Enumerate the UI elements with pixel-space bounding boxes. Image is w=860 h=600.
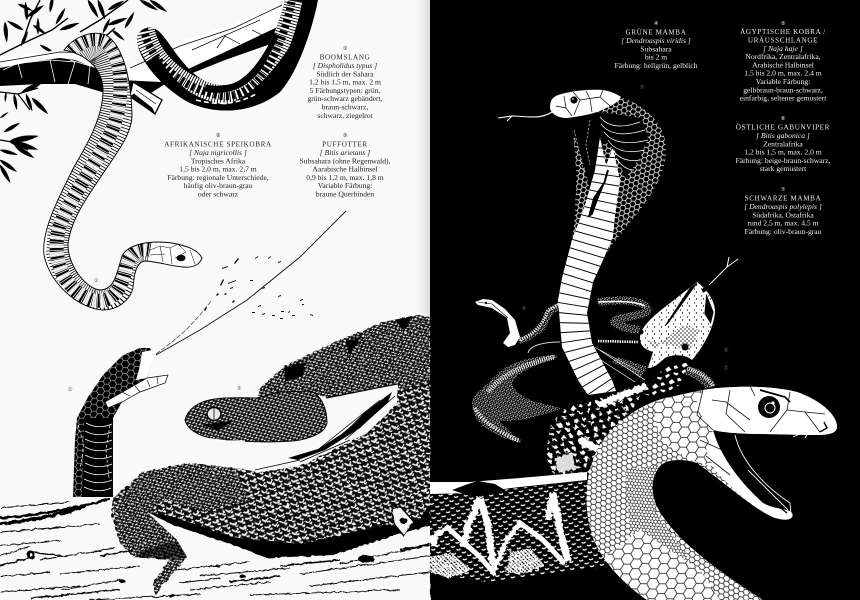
text: Afrikanische Speikobra: Tropisches Afrika [191, 156, 246, 165]
upper coil [258, 315, 430, 400]
text: Schwarze Mamba: Südafrika, Ostafrika [752, 210, 814, 219]
text: Grüne Mamba [615, 21, 698, 70]
illustration: boomslang rear coil [136, 0, 318, 110]
text: Boomslang [307, 46, 383, 120]
text: Grüne Mamba: bis 2 m [645, 53, 667, 62]
text: Puffotter: [ Bitis arietans ] [320, 148, 370, 157]
figure markers: ④ [521, 305, 527, 312]
eye [758, 396, 780, 418]
head and neck [475, 299, 520, 347]
figure markers: ② [67, 386, 73, 393]
illustration: Schwarze Mamba [586, 385, 837, 600]
coil shadow [147, 507, 430, 558]
text: Afrikanische Speikobra: 1,5 bis 2,0 m, max. 2,7 m [179, 165, 257, 174]
figure markers: ③ [236, 385, 242, 392]
text: Boomslang: schwarz, ziegelrot [317, 111, 374, 120]
text: Puffotter: 0,9 bis 1,2 m, max. 1,8 m [306, 173, 384, 182]
hood [562, 97, 666, 282]
text: Afrikanische Speikobra: AFRIKANISCHE SPEIKOBRA [164, 140, 272, 148]
forked tongue [709, 257, 738, 285]
text: Östliche Gabunviper: ÖSTLICHE GABUNVIPER [736, 124, 830, 132]
background: left page [0, 0, 430, 600]
illustration: coil behind cobra [472, 347, 716, 443]
text: Schwarze Mamba [744, 187, 822, 236]
illustration: Östliche Gabunviper head [638, 257, 738, 398]
text: Puffotter: PUFFOTTER [322, 140, 368, 148]
illustration: Afrikanische Speikobra [73, 348, 168, 497]
bone knot on log [392, 506, 414, 536]
dark neck [642, 362, 690, 398]
text: Schwarze Mamba: Färbung: oliv-braun-grau [745, 227, 822, 236]
text: Grüne Mamba: Färbung: hellgrün, gelblich [615, 61, 698, 70]
text: Ägyptische Kobra: einfarbig, seltener gemustert [740, 94, 827, 103]
illustration: venom spray [156, 211, 346, 355]
background: right page [430, 0, 860, 600]
figure markers: ⑥ [723, 347, 729, 354]
text: Afrikanische Speikobra [164, 132, 272, 198]
mouth and fangs [735, 435, 791, 515]
text: Östliche Gabunviper: [ Bitis gabonica ] [756, 131, 810, 140]
text: Östliche Gabunviper: ⑥ [781, 116, 786, 122]
text: Östliche Gabunviper: Färbung: beige-braun-schwarz, [736, 156, 831, 165]
illustration: tree foliage [0, 0, 167, 183]
figure markers: ① [93, 277, 99, 284]
text: Afrikanische Speikobra: [ Naja nigricollis ] [189, 148, 247, 157]
text: Puffotter: Variable Färbung: [318, 181, 372, 190]
text: Schwarze Mamba: [ Dendroaspis polylepis ] [744, 202, 822, 211]
head [550, 90, 621, 118]
tongue [498, 112, 552, 121]
text: Boomslang: braun-schwarz, [322, 102, 368, 112]
illustration: Gabunviper lower body [430, 472, 607, 582]
eye [207, 408, 221, 420]
text: Grüne Mamba: Subsahara [640, 44, 672, 53]
text: Ägyptische Kobra [740, 21, 827, 103]
text: Afrikanische Speikobra: oder schwarz [198, 190, 239, 198]
rear coil [598, 300, 647, 330]
text: Puffotter: Subsahara (ohne Regenwald), [300, 156, 391, 165]
text: Schwarze Mamba: SCHWARZE MAMBA [745, 194, 822, 202]
text: Schwarze Mamba: rund 2,5 m, max. 4,5 m [747, 219, 819, 228]
mid body [518, 301, 560, 344]
illustration: Ägyptische Kobra [498, 90, 666, 400]
text: Afrikanische Speikobra: häufig oliv-braun-grau [184, 181, 253, 190]
zigzag pattern [430, 493, 568, 578]
text: Boomslang: 5 Färbungstypen: grün, [310, 86, 380, 95]
belly [558, 137, 620, 395]
text: Puffotter: braune Querbinden [316, 190, 374, 198]
text: Boomslang: ① [343, 46, 348, 52]
text: Grüne Mamba: ④ [654, 21, 659, 27]
text: Östliche Gabunviper: 1,2 bis 1,5 m, max. 2,0 m [744, 148, 822, 157]
text: Ägyptische Kobra: 1,5 bis 2,0 m, max. 2,4 m [744, 69, 822, 78]
text: Afrikanische Speikobra: ② [216, 132, 221, 139]
text: Ägyptische Kobra: ⑤ [781, 21, 786, 27]
text: Ägyptische Kobra: URÄUSSCHLANGE [748, 36, 818, 44]
illustration: Grüne Mamba [475, 299, 647, 353]
eye [570, 96, 578, 104]
text: Östliche Gabunviper [736, 116, 831, 173]
text: Ägyptische Kobra: Arabische Halbinsel [752, 60, 814, 69]
text: Boomslang: BOOMSLANG [320, 54, 370, 62]
illustration: branch through coil [250, 384, 397, 472]
text: Puffotter [300, 133, 391, 198]
figure markers: ⑤ [639, 84, 645, 91]
text: Ägyptische Kobra: Nordfrika, Zentralafrika, [745, 52, 821, 61]
pale stripe [430, 472, 587, 494]
text: Afrikanische Speikobra: Färbung: regionale Unterschiede, [167, 173, 269, 182]
text: Ägyptische Kobra: ÄGYPTISCHE KOBRA / [740, 28, 826, 36]
open mouth [136, 350, 153, 380]
text: Ägyptische Kobra: gelbbraun-braun-schwarz, [743, 85, 823, 94]
illustration: boomslang main body and head [44, 33, 205, 310]
tail texture [113, 463, 250, 557]
text: Grüne Mamba: [ Dendroaspis viridis ] [621, 36, 691, 45]
text: Ägyptische Kobra: Variable Färbung: [756, 77, 810, 86]
illustration: Puffotter head [185, 391, 327, 442]
illustration: Puffotter body [111, 315, 430, 595]
text: Östliche Gabunviper: stark gemustert [760, 164, 807, 173]
branch stub [130, 82, 162, 114]
figure markers: ⑦ [723, 365, 729, 372]
text: Puffotter: Aarabische Halbinsel [312, 165, 378, 174]
boomslang eye [176, 255, 186, 261]
text: Boomslang: grün-schwarz gebändert, [307, 94, 383, 103]
text: Boomslang: [ Dispholidus typus ] [313, 61, 377, 70]
text: Grüne Mamba: GRÜNE MAMBA [626, 28, 687, 36]
text: Ägyptische Kobra: [ Naja haje ] [763, 44, 803, 53]
text: Östliche Gabunviper: Zentralafrika [763, 139, 803, 148]
illustration: Gabunviper mid coil [547, 383, 648, 476]
text: Schwarze Mamba: ⑦ [781, 187, 786, 193]
text: Boomslang: 1,2 bis 1,5 m, max. 2 m [309, 78, 381, 87]
illustration: tree branch [0, 2, 290, 114]
figure markers [67, 84, 729, 393]
text: Puffotter: ③ [343, 133, 348, 139]
illustration: log [0, 497, 430, 600]
text: Boomslang: Südlich der Sahara [316, 69, 374, 78]
